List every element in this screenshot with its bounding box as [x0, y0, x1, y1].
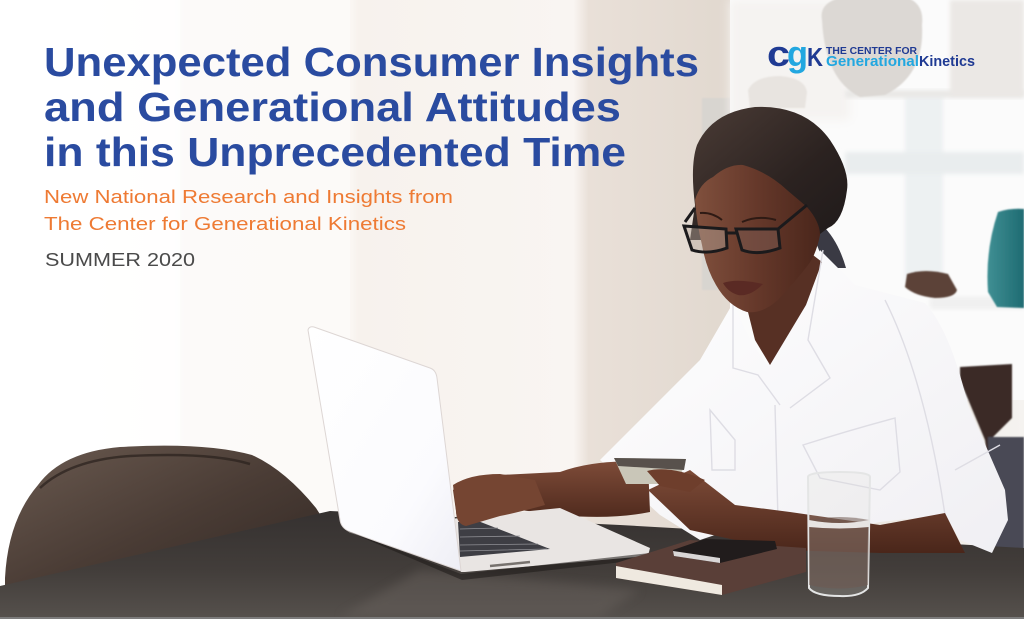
logo: Kinetics	[919, 54, 975, 70]
notebook	[616, 540, 806, 595]
title	[44, 39, 699, 175]
logo mark: CGK: g	[787, 33, 808, 74]
chair	[5, 446, 330, 600]
glasses	[684, 205, 807, 253]
logo: Generational	[826, 54, 919, 70]
logo mark: CGK	[767, 33, 823, 74]
table reflections	[340, 570, 640, 617]
hand on keyboard	[453, 474, 545, 526]
phone	[673, 539, 777, 563]
dark furniture behind woman	[960, 364, 1024, 550]
right forearm and hand	[648, 470, 965, 553]
laptop base	[440, 508, 650, 572]
title: Unexpected Consumer Insights	[44, 39, 699, 85]
decorative dark ornament	[905, 271, 957, 298]
table	[0, 511, 1024, 617]
woman	[453, 107, 1008, 553]
logo mark: CGK: K	[807, 42, 823, 72]
hair bun	[815, 225, 846, 268]
glass of water	[808, 472, 870, 596]
laptop shadow	[340, 528, 650, 580]
subtitle: New National Research and Insights from	[44, 186, 453, 207]
logo mark: CGK: c	[767, 33, 790, 74]
decorative vase on shelf	[748, 0, 922, 108]
hair	[690, 107, 847, 240]
subtitle	[44, 186, 453, 234]
title: and Generational Attitudes	[44, 84, 621, 130]
neck	[745, 245, 822, 365]
shirt body	[600, 250, 1008, 553]
fingers on card	[647, 469, 705, 492]
bottom edge line	[0, 617, 1024, 619]
decorative teal vase	[987, 209, 1024, 308]
mouth	[723, 281, 763, 295]
left forearm	[453, 462, 650, 525]
logo wordmark: THE CENTER FOR	[826, 46, 918, 57]
date: SUMMER 2020	[45, 250, 195, 270]
keyboard	[458, 521, 550, 557]
face	[695, 165, 820, 312]
logo	[767, 33, 975, 74]
credit card	[614, 458, 686, 484]
eyebrows	[700, 213, 776, 222]
laptop lid	[308, 327, 461, 571]
title: in this Unprecedented Time	[44, 129, 626, 175]
subtitle: The Center for Generational Kinetics	[44, 213, 406, 234]
shirt collar and folds	[710, 250, 1000, 520]
laptop	[308, 327, 650, 580]
laptop front ports	[490, 562, 530, 566]
